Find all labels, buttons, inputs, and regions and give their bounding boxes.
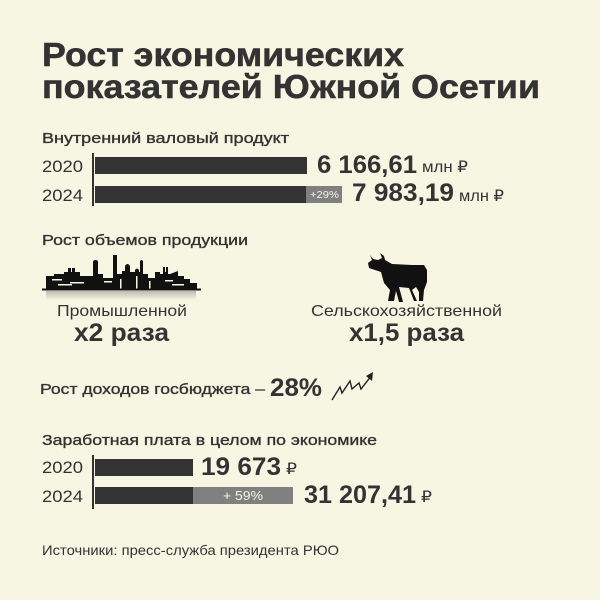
heading: gdp: Внутренний валовый продукт: [42, 130, 289, 147]
gdp axis: [92, 153, 94, 206]
heading: wages: Заработная плата в целом по экономике: [42, 432, 377, 449]
title: показателей Южной Осетии: [42, 68, 540, 105]
panel: agriculture: [311, 253, 502, 347]
label: budget revenue: Рост доходов госбюджета –: [40, 381, 266, 398]
gdp row 2020: 6 166,61: [317, 151, 417, 179]
wages row 2020: 19 673: [201, 453, 281, 481]
gdp row 2024: 7 983,19: [352, 179, 454, 207]
gdp row 2024: +29%: [310, 189, 339, 201]
wages axis: [92, 455, 94, 509]
gdp row 2020: [42, 151, 468, 179]
panel: budget revenue: [40, 372, 373, 402]
label: industry: Промышленной: [57, 303, 187, 320]
value: agriculture: x1,5 раза: [349, 319, 465, 347]
wages row 2024: [42, 481, 432, 509]
wages row 2024: 2024: [42, 487, 83, 506]
wages row 2020: [42, 453, 297, 481]
panel: gdp: [42, 130, 504, 207]
heading: output growth: Рост объемов продукции: [42, 232, 248, 249]
gdp row 2024: [42, 179, 504, 207]
wages row 2024: ₽: [421, 489, 432, 506]
panel: wages: [42, 432, 432, 509]
wages row 2020: 2020: [42, 458, 83, 477]
wages row 2020: ₽: [286, 461, 297, 478]
icon: factory skyline: [42, 255, 201, 300]
gdp row 2020: млн ₽: [422, 159, 468, 176]
gdp row 2024: млн ₽: [459, 188, 504, 205]
gdp row 2020: 2020: [42, 157, 83, 176]
icon: cow: [368, 253, 427, 302]
label: agriculture: Сельскохозяйственной: [311, 303, 502, 320]
wages row 2024: 31 207,41: [304, 481, 416, 509]
icon: rising arrow: [332, 372, 373, 400]
value: industry: x2 раза: [74, 319, 170, 347]
panel: industry: [42, 255, 201, 347]
title: [42, 36, 540, 105]
gdp row 2024: 2024: [42, 186, 83, 205]
title: Рост экономических: [42, 36, 405, 73]
wages row 2024: + 59%: [223, 489, 263, 503]
source note: Источники: пресс-служба президента РЮО: [42, 542, 339, 558]
value: budget revenue: 28%: [270, 374, 322, 402]
